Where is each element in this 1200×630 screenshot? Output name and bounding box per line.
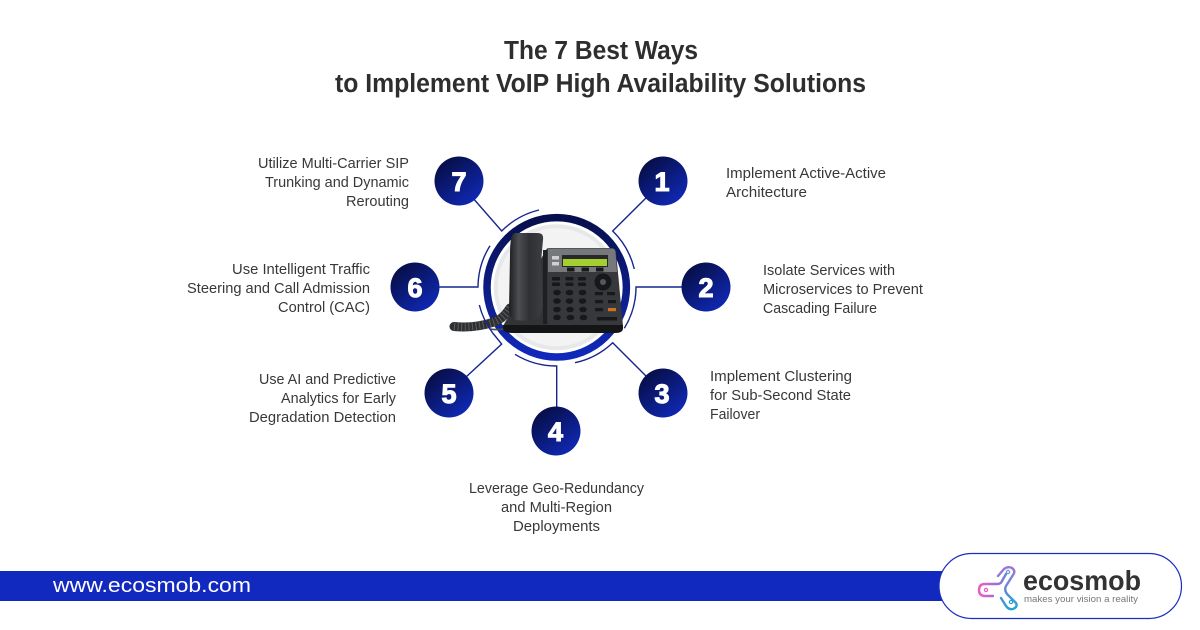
step 6 <box>187 262 440 316</box>
badge 1 <box>638 156 688 206</box>
website url: www.ecosmob.com <box>52 574 251 597</box>
badge 5: 5 <box>441 379 457 409</box>
step 3 <box>638 368 852 423</box>
label 2: Cascading Failure <box>763 301 877 317</box>
title: to Implement VoIP High Availability Solutions <box>335 70 866 98</box>
label 6 <box>187 262 370 316</box>
title <box>335 37 866 98</box>
label 2: Isolate Services with <box>763 263 895 279</box>
coiled cord <box>454 308 510 327</box>
step 2 <box>682 262 923 317</box>
footer bar <box>0 571 945 601</box>
step 1 <box>638 156 886 206</box>
keypad panel <box>548 272 622 325</box>
label 2: Microservices to Prevent <box>763 282 923 298</box>
label 5: Degradation Detection <box>249 410 396 426</box>
label 3: Implement Clustering <box>710 369 852 385</box>
badge 6: 6 <box>407 273 423 303</box>
keys <box>552 268 617 320</box>
logo pill <box>939 554 1182 618</box>
label 2 <box>763 263 923 317</box>
step 7 <box>258 156 484 210</box>
badge 1: 1 <box>654 167 670 197</box>
label 5: Analytics for Early <box>281 391 397 407</box>
label 6: Control (CAC) <box>278 300 370 316</box>
label 7: Rerouting <box>346 194 409 210</box>
label 1 <box>726 166 886 201</box>
wordmark: ecosmob <box>1023 565 1141 596</box>
label 6: Steering and Call Admission <box>187 281 370 297</box>
ring <box>487 218 626 357</box>
icon: ecosmob logo mark <box>979 567 1017 609</box>
tagline: makes your vision a reality <box>1024 594 1138 605</box>
label 4 <box>469 481 645 535</box>
badge 4 <box>532 406 580 456</box>
screen <box>562 255 608 267</box>
badge 4: 4 <box>548 417 563 447</box>
badge 5 <box>424 368 474 418</box>
label 5: Use AI and Predictive <box>259 372 396 388</box>
icon: desk phone <box>454 233 623 333</box>
side buttons <box>552 256 559 260</box>
label 7: Utilize Multi-Carrier SIP <box>258 156 409 172</box>
label 1: Implement Active-Active <box>726 166 886 182</box>
label 6: Use Intelligent Traffic <box>232 262 370 278</box>
badge 3 <box>638 368 688 418</box>
label 3 <box>710 369 852 423</box>
label 7: Trunking and Dynamic <box>265 175 409 191</box>
label 3: for Sub-Second State <box>710 388 851 404</box>
inner disc <box>496 226 618 348</box>
title: The 7 Best Ways <box>504 37 698 65</box>
badge 3: 3 <box>654 379 670 409</box>
label 3: Failover <box>710 407 760 423</box>
base <box>503 248 623 332</box>
step 4 <box>469 406 645 535</box>
label 5 <box>249 372 397 426</box>
badge 2: 2 <box>698 273 714 303</box>
faceplate <box>548 248 617 272</box>
connector lines and arcs <box>438 194 683 410</box>
badge 6 <box>390 262 440 312</box>
step 5 <box>249 368 474 426</box>
badge 7 <box>434 156 484 206</box>
label 4: Leverage Geo-Redundancy <box>469 481 645 497</box>
badge 7: 7 <box>451 167 467 197</box>
label 4: and Multi-Region <box>501 500 612 516</box>
label 1: Architecture <box>726 185 807 201</box>
handset <box>509 233 543 321</box>
central phone emblem <box>454 218 626 357</box>
label 4: Deployments <box>513 519 600 535</box>
badge 2 <box>682 262 730 312</box>
label 7 <box>258 156 409 210</box>
